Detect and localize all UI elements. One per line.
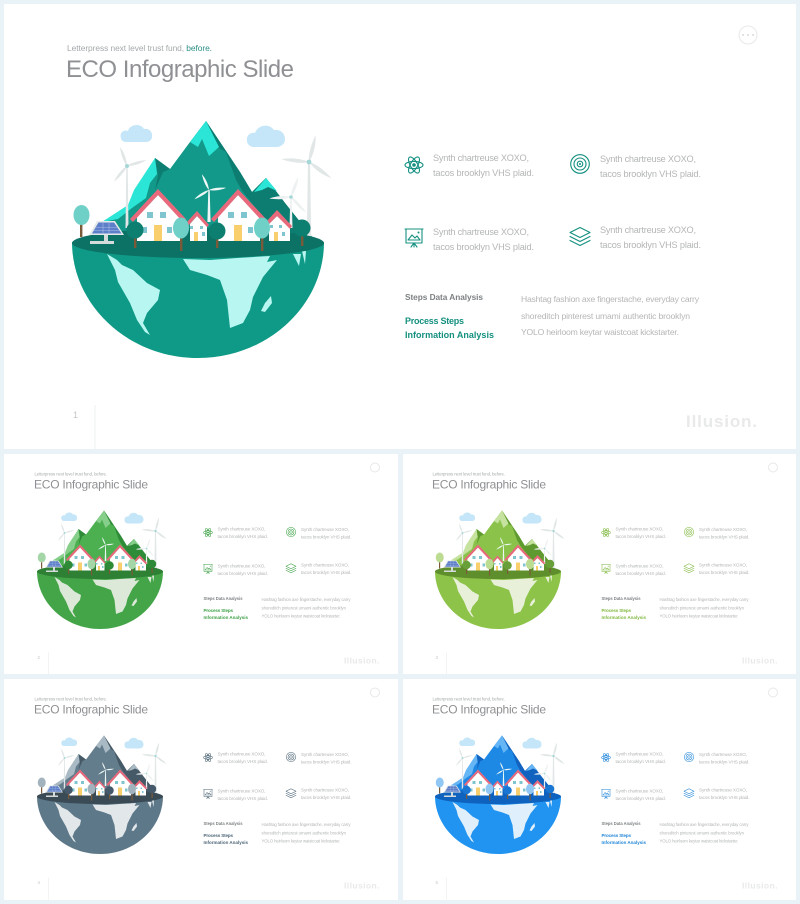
slide header: Letterpress next level trust fund, before. xyxy=(34,696,107,702)
analysis block: shoreditch pinterest umami authentic brooklyn xyxy=(660,830,745,836)
feature: atom: tacos brooklyn VHS plaid. xyxy=(433,168,534,178)
analysis block: Information Analysis xyxy=(602,615,646,620)
feature: target xyxy=(571,154,701,179)
icon: menu circle xyxy=(370,688,380,697)
feature list: Synth chartreuse XOXO, xyxy=(699,752,747,757)
feature list: tacos brooklyn VHS plaid. xyxy=(616,796,666,801)
analysis block: Process Steps xyxy=(602,833,631,838)
feature: target: Synth chartreuse XOXO, xyxy=(600,154,696,164)
analysis block xyxy=(204,821,351,845)
feature: presentation board xyxy=(405,227,534,252)
illustration: lime globe xyxy=(435,510,565,629)
feature list: tacos brooklyn VHS plaid. xyxy=(218,571,268,576)
globe hemisphere xyxy=(72,242,324,358)
page number xyxy=(436,878,446,900)
slide header: ECO Infographic Slide xyxy=(66,56,294,83)
analysis block: shoreditch pinterest umami authentic brooklyn xyxy=(262,606,347,610)
analysis block xyxy=(204,596,351,620)
feature list: Synth chartreuse XOXO, xyxy=(301,788,349,792)
ground ellipse xyxy=(72,228,324,258)
feature list: Synth chartreuse XOXO, xyxy=(616,752,664,756)
page number xyxy=(38,878,48,900)
slide header xyxy=(34,696,148,716)
slide header: Letterpress next level trust fund, before. xyxy=(432,472,505,476)
feature list: tacos brooklyn VHS plaid. xyxy=(699,570,750,575)
feature: atom xyxy=(405,153,534,178)
analysis block: Hashtag fashion axe fingerstache, everyday carry xyxy=(262,597,351,602)
feature list: tacos brooklyn VHS plaid. xyxy=(301,534,352,540)
feature list: tacos brooklyn VHS plaid. xyxy=(218,759,268,764)
page number: 2 xyxy=(38,655,40,660)
feature list: Synth chartreuse XOXO, xyxy=(218,564,266,568)
trees xyxy=(74,205,310,251)
feature list: Synth chartreuse XOXO, xyxy=(699,527,747,532)
analysis block: Information Analysis xyxy=(602,840,646,845)
feature: presentation board: Synth chartreuse XOXO, xyxy=(433,227,529,237)
illustration: eco globe with village xyxy=(72,121,332,358)
slide header: Letterpress next level trust fund, before. xyxy=(432,696,505,702)
analysis block: YOLO heirloom keytar waistcoat kickstarter. xyxy=(262,614,340,618)
page number: 4 xyxy=(38,880,40,885)
analysis headings: Process Steps xyxy=(405,316,464,326)
analysis block: Steps Data Analysis xyxy=(602,821,641,826)
feature list: Synth chartreuse XOXO, xyxy=(699,788,747,792)
analysis paragraph: shoreditch pinterest umami authentic brooklyn xyxy=(521,311,690,321)
icon: menu circle xyxy=(739,26,757,44)
analysis block: YOLO heirloom keytar waistcoat kickstarter. xyxy=(660,838,738,844)
analysis block: Hashtag fashion axe fingerstache, everyday carry xyxy=(660,597,749,602)
feature list xyxy=(204,752,352,801)
feature list: Synth chartreuse XOXO, xyxy=(699,562,747,568)
analysis block: shoreditch pinterest umami authentic brooklyn xyxy=(262,830,347,836)
analysis block: Steps Data Analysis xyxy=(204,821,243,826)
analysis block xyxy=(602,821,749,845)
slide header xyxy=(66,43,294,83)
feature list: Synth chartreuse XOXO, xyxy=(218,526,266,532)
analysis paragraph: Hashtag fashion axe fingerstache, everyday carry xyxy=(521,294,700,304)
brand wordmark: Illusion. xyxy=(686,412,757,431)
feature: presentation board: tacos brooklyn VHS plaid. xyxy=(433,242,534,252)
wind turbines xyxy=(112,135,332,238)
solar panel xyxy=(89,221,124,244)
analysis block: YOLO heirloom keytar waistcoat kickstarter. xyxy=(262,838,340,844)
feature list xyxy=(602,752,750,801)
illustration: slate globe xyxy=(37,736,167,854)
panel: main teal slide xyxy=(4,4,796,449)
analysis block: Hashtag fashion axe fingerstache, everyday carry xyxy=(660,822,749,827)
page number: 3 xyxy=(436,655,438,660)
illustration: green globe xyxy=(37,510,167,629)
feature list: tacos brooklyn VHS plaid. xyxy=(699,760,750,764)
page number xyxy=(73,405,95,449)
feature list: tacos brooklyn VHS plaid. xyxy=(616,759,666,764)
clouds xyxy=(121,125,285,147)
page number xyxy=(436,652,446,674)
panel: slate slide xyxy=(4,679,398,900)
analysis block: Information Analysis xyxy=(204,615,248,620)
feature: target: tacos brooklyn VHS plaid. xyxy=(600,169,701,179)
houses xyxy=(130,189,292,241)
analysis block: YOLO heirloom keytar waistcoat kickstarter. xyxy=(660,614,738,618)
slide header: ECO Infographic Slide xyxy=(34,702,148,716)
analysis block: Hashtag fashion axe fingerstache, everyday carry xyxy=(262,822,351,827)
analysis block: Process Steps xyxy=(204,608,233,613)
feature list: tacos brooklyn VHS plaid. xyxy=(301,570,352,575)
panel: blue slide xyxy=(403,679,796,900)
icon: menu circle xyxy=(768,463,778,472)
feature list: Synth chartreuse XOXO, xyxy=(218,788,266,794)
feature list xyxy=(602,526,750,576)
analysis block: Information Analysis xyxy=(204,840,248,845)
slide header: ECO Infographic Slide xyxy=(432,702,546,716)
brand wordmark: Illusion. xyxy=(344,656,380,666)
brand wordmark: Illusion. xyxy=(344,880,380,890)
feature list: Synth chartreuse XOXO, xyxy=(616,564,664,568)
analysis block: Steps Data Analysis xyxy=(204,596,243,601)
feature list: tacos brooklyn VHS plaid. xyxy=(699,534,750,540)
brand wordmark: Illusion. xyxy=(742,656,778,666)
feature list: tacos brooklyn VHS plaid. xyxy=(218,534,268,539)
mountains xyxy=(102,121,313,238)
feature list: Synth chartreuse XOXO, xyxy=(616,788,664,794)
analysis paragraph xyxy=(521,294,700,337)
analysis block xyxy=(602,596,749,620)
slide header: ECO Infographic Slide xyxy=(34,478,148,492)
page number xyxy=(38,652,48,674)
icon: menu circle xyxy=(370,463,380,472)
slide header: Letterpress next level trust fund, before. xyxy=(34,472,107,476)
continents xyxy=(107,251,306,335)
analysis block: Steps Data Analysis xyxy=(602,596,641,601)
feature list: tacos brooklyn VHS plaid. xyxy=(699,795,750,800)
page number: 1 xyxy=(73,410,78,420)
panel: lime slide xyxy=(403,454,796,674)
feature list xyxy=(204,526,352,576)
feature list: Synth chartreuse XOXO, xyxy=(301,752,349,757)
brand wordmark: Illusion. xyxy=(742,880,778,890)
slide header xyxy=(34,472,148,492)
page number: 5 xyxy=(436,880,438,885)
slide header: ECO Infographic Slide xyxy=(432,478,546,492)
feature list: Synth chartreuse XOXO, xyxy=(616,526,664,532)
feature list: Synth chartreuse XOXO, xyxy=(301,527,349,532)
analysis headings: Steps Data Analysis xyxy=(405,292,483,302)
feature: layers: Synth chartreuse XOXO, xyxy=(600,225,696,235)
feature list: Synth chartreuse XOXO, xyxy=(301,562,349,568)
slide header: Letterpress next level trust fund, before. xyxy=(67,43,212,53)
feature list: tacos brooklyn VHS plaid. xyxy=(616,534,666,539)
analysis block: shoreditch pinterest umami authentic brooklyn xyxy=(660,606,745,610)
icon: menu circle xyxy=(768,688,778,697)
analysis paragraph: YOLO heirloom keytar waistcoat kickstarter. xyxy=(521,327,679,337)
feature list: tacos brooklyn VHS plaid. xyxy=(616,571,666,576)
feature list: tacos brooklyn VHS plaid. xyxy=(301,760,352,764)
feature list: Synth chartreuse XOXO, xyxy=(218,752,266,756)
analysis headings: Information Analysis xyxy=(405,330,494,340)
feature list: tacos brooklyn VHS plaid. xyxy=(218,796,268,801)
feature: layers: tacos brooklyn VHS plaid. xyxy=(600,240,701,250)
analysis block: Process Steps xyxy=(602,608,631,613)
slide header xyxy=(432,472,546,492)
analysis headings xyxy=(405,292,494,340)
analysis block: Process Steps xyxy=(204,833,233,838)
feature: layers xyxy=(570,225,701,250)
feature list: tacos brooklyn VHS plaid. xyxy=(301,795,352,800)
illustration: blue globe xyxy=(435,736,565,854)
feature: atom: Synth chartreuse XOXO, xyxy=(433,153,529,163)
slide header xyxy=(432,696,546,716)
panel: green slide xyxy=(4,454,398,674)
